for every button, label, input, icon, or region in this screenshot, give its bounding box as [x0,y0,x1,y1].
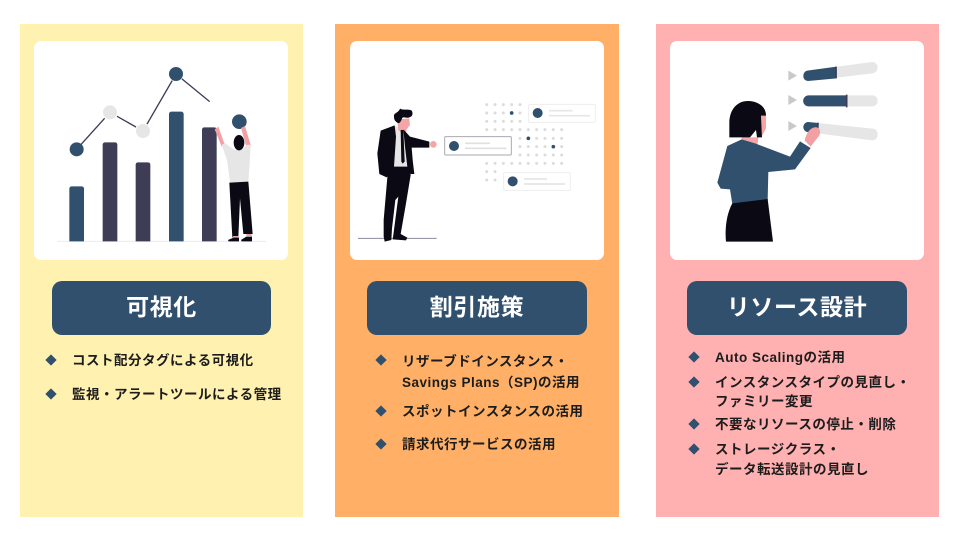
bullet list: discount measures: Savings Plans（SP)の活用 [402,375,580,390]
bullet list: resource design: 不要なリソースの停止・削除 [715,417,896,432]
illustration: person reaching up [215,126,253,241]
bullet list: resource design: ストレージクラス・ [715,442,840,457]
heading: discount measures: 割引施策 [430,294,524,320]
bullet list: resource design: Auto Scalingの活用 [715,350,846,365]
slider 2 [788,95,878,107]
heading: resource design [687,281,907,335]
bullet list: resource design: インスタンスタイプの見直し・ [715,375,910,390]
illustration: cards and dot grid [445,103,595,190]
image card: resource design [670,41,924,260]
panel: visualization background [20,24,303,517]
image card: discount [350,41,604,260]
illustration: man in suit [358,109,437,242]
bullet list: discount measures: スポットインスタンスの活用 [402,404,583,419]
bullet list: discount measures: 請求代行サービスの活用 [402,437,556,452]
heading: discount measures [367,281,587,335]
bullet list: discount measures [375,354,583,452]
woman [717,101,820,242]
card bottom [504,173,570,190]
bullet list: visualization: 監視・アラートツールによる管理 [72,387,282,402]
card centre highlighted [445,137,511,155]
dot grid [485,103,563,181]
bullet list: resource design: データ転送設計の見直し [715,462,869,477]
bullet list: visualization [45,353,282,402]
heading: visualization: 可視化 [126,294,197,320]
slider 3 [788,121,878,140]
heading: visualization [52,281,271,335]
bullet list: discount measures: リザーブドインスタンス・ [402,354,569,369]
bullet list: resource design: ファミリー変更 [715,394,813,409]
panel: discount background [335,24,619,517]
card top right [529,104,595,122]
bullet list: resource design [688,350,910,477]
bullet list: visualization: コスト配分タグによる可視化 [72,353,254,368]
slider 1 [788,62,878,81]
illustration: bar chart with person [57,66,266,241]
illustration: woman adjusting sliders [717,62,878,242]
image card: visualization [34,41,288,260]
panel: resource design background [656,24,939,517]
heading: resource design: リソース設計 [727,294,867,320]
